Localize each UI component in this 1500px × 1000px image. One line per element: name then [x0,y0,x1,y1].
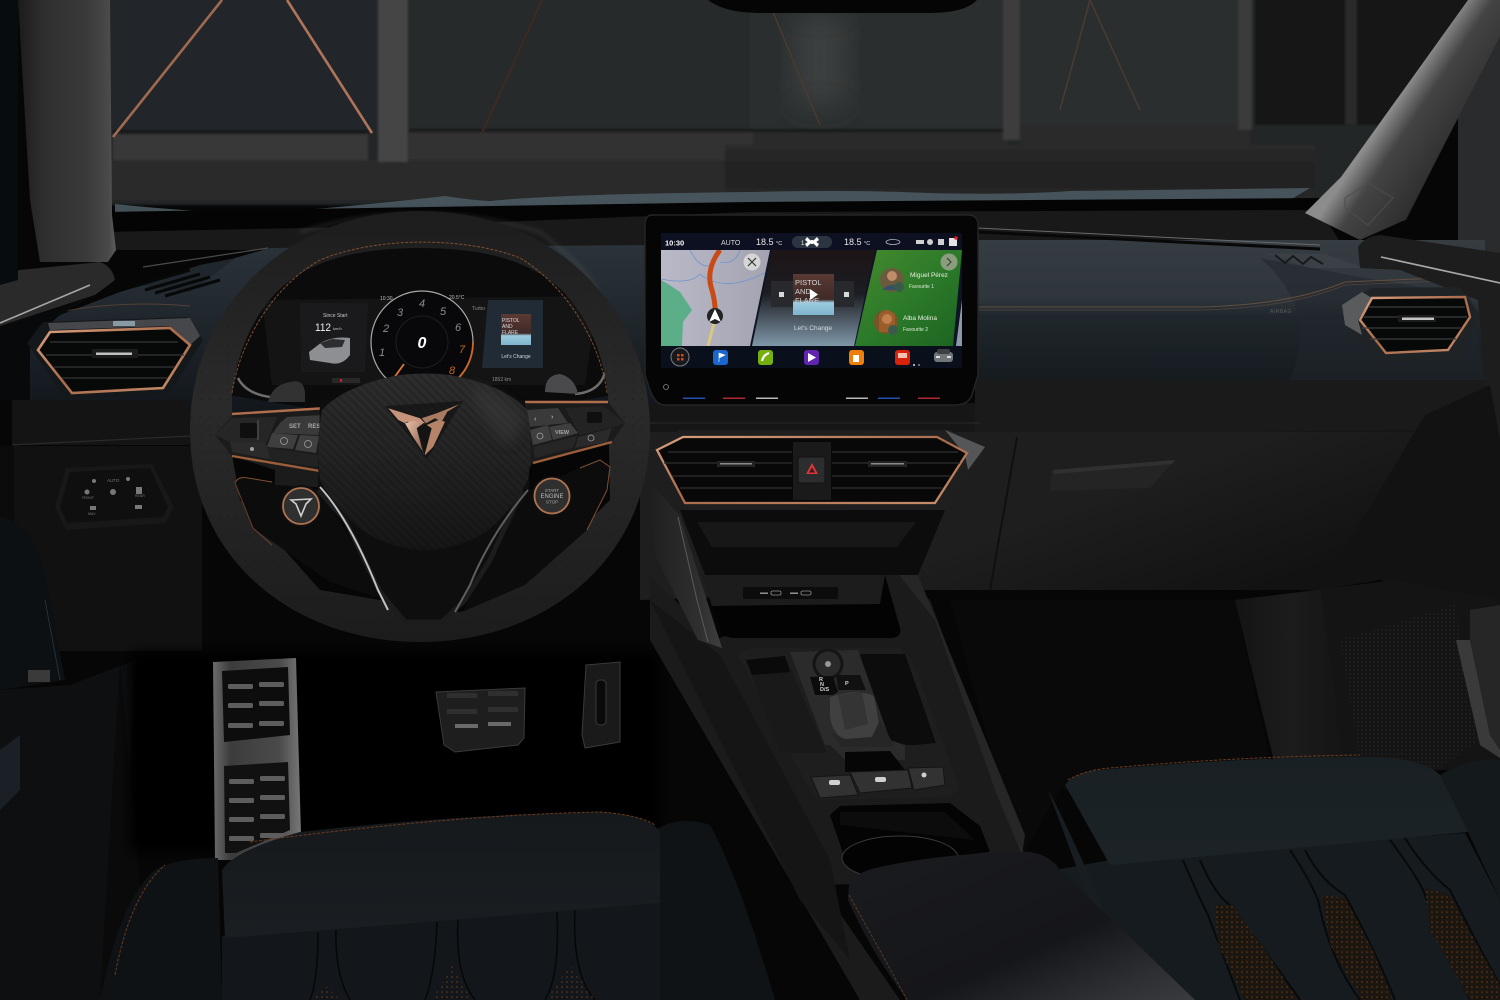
right spoke with controls: › [551,414,554,421]
media tile: AND [795,287,811,296]
cluster media panel: Let's Change [501,354,531,360]
tachometer gauge: 10:30 [380,296,393,302]
status bar [665,236,958,248]
touchscreen [645,215,978,405]
rear view mirror [708,0,977,13]
cluster left panel: 112 [315,322,331,334]
Cupra logo on hub [385,401,463,459]
map tile [661,250,770,346]
favourites tile: Favourite 2 [903,327,928,333]
left spoke with controls [215,408,330,488]
lower wheel openings [235,460,610,612]
favourites tile: Alba Molina [903,315,937,322]
steering wheel rim [190,211,650,642]
left switch panel: AUTO [107,478,120,483]
left switch panel: MAX [88,512,96,516]
start engine button: START [545,488,559,493]
center armrest [848,852,1195,1000]
gear lever [830,692,879,741]
media tile: Let's Change [794,325,832,332]
left switch panel: FRONT [82,496,95,500]
right spoke with controls: ‹ [534,416,537,423]
right dashboard panel: AIRBAG [1270,309,1292,315]
left seat [100,812,775,1000]
app dock [670,348,953,366]
steering wheel hub [318,374,531,550]
side window right [1405,37,1500,262]
dash stitching [978,278,1440,307]
right door lower [1235,580,1500,770]
cluster media panel [482,300,543,368]
start engine button: STOP [546,500,558,504]
building pillars [378,0,1357,162]
gear selector console plate [738,648,960,800]
favourites tile [855,250,962,346]
under vent dark storage [680,510,945,575]
tachometer gauge [371,291,485,393]
tachometer gauge: 20.5°C [449,295,465,301]
hazard button [798,457,825,483]
tachometer gauge: 4 [419,298,425,310]
status bar: 18.5 °C [844,237,870,247]
left A pillar [0,0,116,285]
steering wheel chrome spokes [318,400,530,622]
status bar: 18.5 °C [756,237,782,247]
brushed console trim [648,480,722,648]
right dashboard panel [975,228,1485,380]
tachometer gauge: 2 [382,323,389,335]
gear labels: D/S [820,687,830,693]
cluster left panel [309,313,350,364]
cluster left panel: Since Start [323,313,348,319]
parking buttons [811,767,945,798]
brake pedal [436,688,525,752]
gear labels: R [819,677,823,683]
accelerator pedal [582,662,620,748]
windshield view [105,0,1485,214]
gear labels: P [845,681,849,687]
footrest [213,658,301,860]
right seat [1048,755,1500,1000]
media tile [752,250,875,346]
left switch panel [55,464,174,530]
instrument cluster: 1852 km [492,377,511,383]
gear labels: N [820,682,824,688]
steering column stalks [238,372,605,398]
drive mode knob [814,650,842,678]
tachometer gauge: 0 [418,335,427,352]
rim stitching [232,242,607,393]
cluster media panel: FLARE [502,330,519,336]
cluster media panel: AND [502,324,513,330]
media tile: FLARE [795,296,819,305]
climate touch bar [664,384,940,399]
tachometer gauge: 7 [459,344,466,356]
left switch panel: REAR [135,494,145,498]
tachometer gauge: Turbo [472,306,485,312]
dash top black band [105,198,1330,240]
copper wall lines [113,0,1140,137]
cup holder [830,803,990,880]
instrument cluster [238,291,605,398]
windshield reflection [115,188,1310,214]
media tile: PISTOL [795,278,822,287]
left spoke with controls: SET [289,424,301,430]
favourites tile: Miguel Pérez [910,272,948,279]
left door cap [0,262,115,400]
status bar: 10:30 [665,238,684,248]
center console sides [650,568,1025,1000]
left lower dash and door [0,446,202,1000]
status bar: AUTO [721,240,741,247]
driver instrument binnacle [228,242,615,410]
tachometer gauge: 8 [449,365,456,377]
left spoke with controls: RES [308,424,320,430]
right door cap [1358,235,1500,440]
glove box panel [640,385,1500,620]
gear labels [810,675,866,695]
status bar: 1 [801,241,805,247]
tachometer gauge: 5 [440,306,447,318]
paddle shifters [268,374,578,402]
lower dash trim band [12,380,1490,445]
cluster media panel: PISTOL [502,318,520,324]
footwell [130,652,660,852]
left dashboard panel [30,245,660,420]
left air vent [27,317,203,400]
right spoke with controls: VIEW [555,430,570,436]
start engine button: ENGINE [540,494,564,500]
storage slot [845,751,905,772]
right spoke with controls [520,402,625,475]
tachometer gauge: 3 [397,307,404,319]
start engine button [532,476,572,516]
right air vent [1342,287,1480,362]
tachometer gauge: 6 [455,322,462,334]
favourites tile: Favourite 1 [909,284,934,290]
Cupra mode button [280,485,322,527]
right A pillar [1305,0,1500,240]
center air vent [650,430,985,510]
wireless tray and USB ports [702,573,900,638]
cluster left panel: km/h [333,326,342,331]
tachometer gauge: 1 [379,347,385,359]
